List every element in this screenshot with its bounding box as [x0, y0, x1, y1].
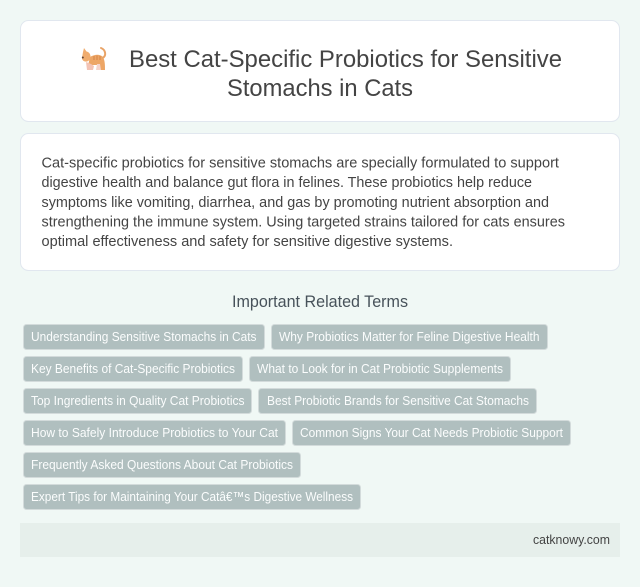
chip: How to Safely Introduce Probiotics to Your Cat: [31, 425, 278, 440]
description text: symptoms like vomiting, diarrhea, and gas by promoting nutrient absorption and: [42, 195, 549, 211]
chip: Common Signs Your Cat Needs Probiotic Support: [300, 425, 563, 440]
panel: title card: [20, 20, 620, 122]
chip: [24, 484, 360, 510]
chip: [24, 356, 242, 382]
panel: related term chips: [24, 324, 570, 510]
chip: What to Look for in Cat Probiotic Supplements: [257, 361, 503, 376]
description text: digestive health and balance gut flora in felines. These probiotics help reduce: [42, 175, 532, 191]
chip: [292, 420, 570, 446]
icon: cat: [82, 48, 105, 70]
heading: important related terms: Important Related Terms: [232, 293, 408, 311]
chip: [24, 420, 286, 446]
chip: Frequently Asked Questions About Cat Probiotics: [31, 457, 293, 472]
title text: [129, 46, 562, 102]
description text: strengthening the immune system. Using targeted strains tailored for cats ensures: [42, 214, 565, 230]
chip: Best Probiotic Brands for Sensitive Cat Stomachs: [267, 393, 529, 408]
chip: [258, 388, 536, 414]
chip: [250, 356, 510, 382]
chip: Understanding Sensitive Stomachs in Cats: [31, 329, 257, 344]
chip: Why Probiotics Matter for Feline Digestive Health: [279, 329, 540, 344]
chip: Key Benefits of Cat-Specific Probiotics: [31, 361, 235, 376]
chip: [24, 324, 264, 350]
description text: optimal effectiveness and safety for sensitive digestive systems.: [42, 234, 453, 250]
chip: [272, 324, 548, 350]
title text: Stomachs in Cats: [227, 75, 413, 102]
chip: Expert Tips for Maintaining Your Catâ€™s Digestive Wellness: [31, 489, 353, 504]
footer text: catknowy.com: [533, 532, 610, 547]
title text: Best Cat-Specific Probiotics for Sensitive: [129, 46, 562, 73]
chip: Top Ingredients in Quality Cat Probiotics: [31, 393, 245, 408]
description text: [42, 156, 565, 250]
chip: [24, 388, 252, 414]
chip: [24, 452, 300, 478]
description text: Cat-specific probiotics for sensitive stomachs are specially formulated to support: [42, 156, 559, 172]
footer: [20, 523, 620, 557]
panel: description: [20, 134, 620, 270]
